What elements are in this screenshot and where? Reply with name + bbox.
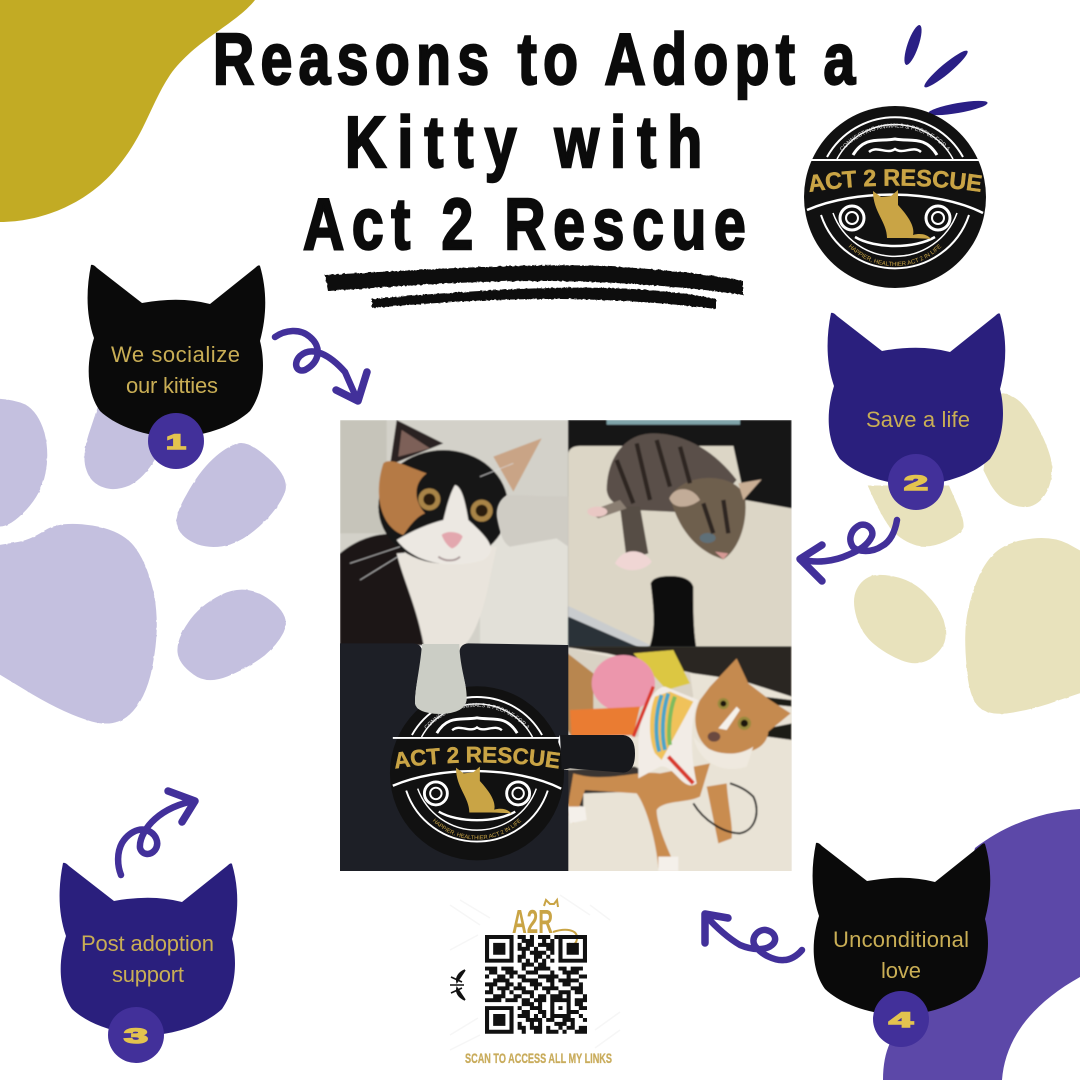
photo: tabby kitten on scale [497,420,792,650]
photo: calico kitten [340,420,570,650]
icon: small spark [450,970,465,1000]
QR caption: SCAN TO ACCESS ALL MY LINKS [465,1050,612,1066]
background blob: purple bottom right [883,809,1080,1080]
logo: Act 2 Rescue top right: CONNECTING ANIMALS & PEOPLE FOR A [840,123,950,152]
callout 2: save a life: Save a life [866,407,970,432]
arrow 4 [705,914,802,960]
panel: puzzle photo collage [340,380,792,871]
logo: Act 2 Rescue top right: HAPPIER, HEALTHIER ACT 2 IN LIFE [848,244,942,266]
QR brand cat ears and tail [544,900,577,945]
callout 3: post adoption support: support [112,962,184,987]
QR code [485,935,587,1034]
puzzle tab: dark right tab [560,735,635,773]
logo: Act 2 Rescue on puzzle tile: CONNECTING ANIMALS & PEOPLE FOR A [424,702,530,730]
callout 2: save a life: 2 [904,472,928,495]
callout 1: we socialize our kitties: 1 [166,431,187,454]
callout 2: save a life [828,313,1005,510]
puzzle tab: light tab of calico photo [415,644,467,714]
callout 3: post adoption support [60,863,237,1063]
callout 4: unconditional love: love [881,958,921,983]
sparks: navy accent strokes [901,23,988,118]
QR code panel [450,895,620,1066]
QR brand mark: A2R: A2R [512,903,553,940]
QR background stripes [450,895,620,1050]
logo: Act 2 Rescue on puzzle tile [390,686,564,860]
callout 3: post adoption support: Post adoption [81,931,214,956]
callout 4: unconditional love: Unconditional [833,927,969,952]
puzzle piece: dark logo tile [340,643,568,871]
callout 3: post adoption support: 3 [124,1025,148,1048]
callout 4: unconditional love: 4 [889,1009,914,1032]
callout 4: unconditional love [813,843,990,1047]
title: Act 2 Rescue [303,184,746,265]
paw print: lavender left [0,400,284,722]
callout 1: we socialize our kitties [88,265,265,469]
arrow 2 [800,520,897,581]
callout 1: we socialize our kitties: We socialize [111,342,240,367]
logo: Act 2 Rescue top right: ACT 2 RESCUE [809,169,982,192]
title: Kitty with [345,102,702,183]
photo: orange cat in rainbow dress [561,647,793,873]
arrow 1 [275,331,367,401]
brush underline [325,265,743,309]
logo: Act 2 Rescue top right [804,106,986,288]
title: Reasons to Adopt a [213,19,856,100]
title [213,19,856,265]
arrow 3 [118,791,195,875]
logo: Act 2 Rescue on puzzle tile: ACT 2 RESCUE [395,746,560,769]
background blob: olive top left [0,0,255,222]
paw print: cream right [856,394,1080,712]
callout 1: we socialize our kitties: our kitties [126,373,218,398]
logo: Act 2 Rescue on puzzle tile: HAPPIER, HEALTHIER ACT 2 IN LIFE [432,818,522,840]
